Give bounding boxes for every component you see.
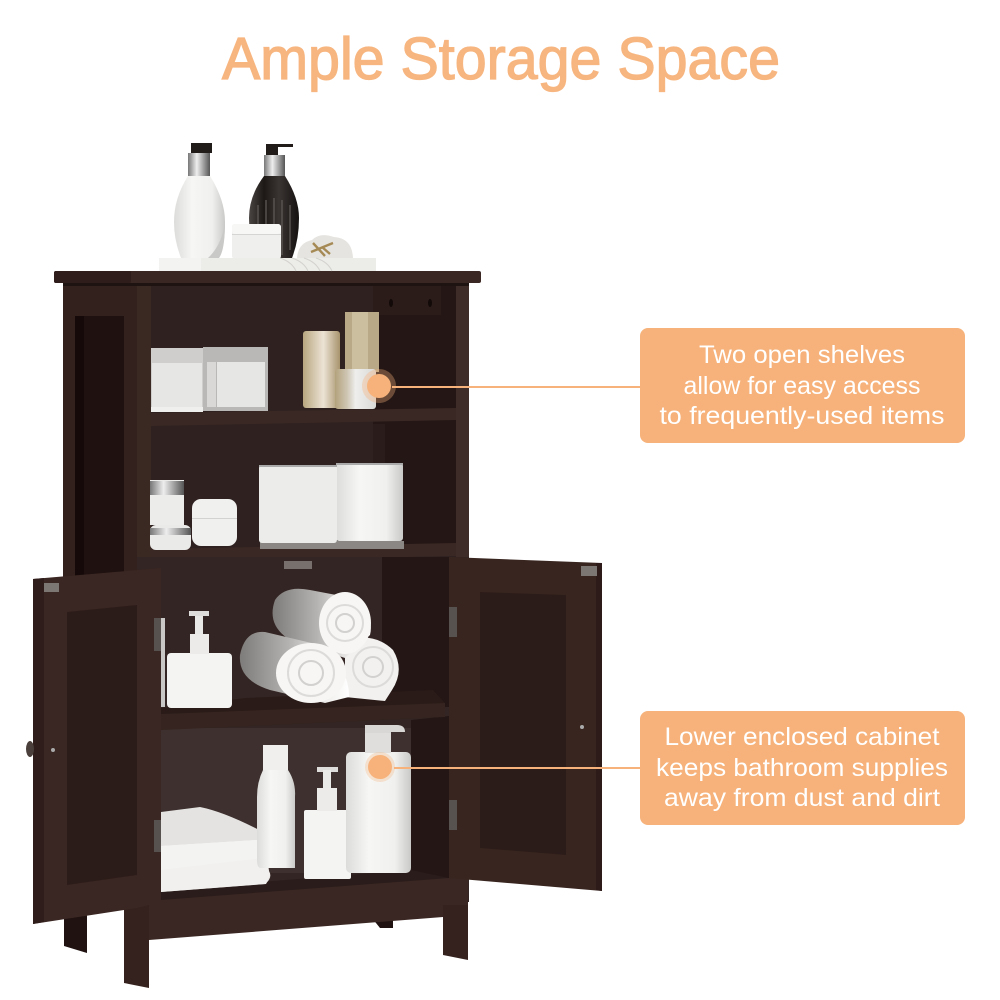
callout: open shelves — [640, 328, 965, 443]
items on cabinet floor — [161, 725, 411, 892]
front legs — [124, 905, 468, 988]
callout: lower cabinet: keeps bathroom supplies — [656, 754, 948, 782]
dried flower — [297, 235, 353, 258]
items on cabinet top — [159, 143, 376, 271]
cabinet floor and bottom rail — [149, 870, 468, 940]
tall lotion bottle — [257, 745, 295, 868]
large pump bottle — [346, 725, 411, 873]
cream jar — [192, 499, 237, 546]
callout: open shelves: Two open shelves — [699, 341, 905, 369]
callout marker: open shelves — [362, 369, 640, 403]
upper open shelving interior — [137, 282, 469, 572]
left door — [26, 568, 161, 924]
callout: lower cabinet — [640, 711, 965, 825]
cotton boxes — [151, 347, 268, 412]
candles — [303, 312, 379, 409]
right door — [449, 557, 602, 891]
hinge latch — [284, 561, 312, 569]
towel roll right — [345, 638, 399, 701]
silver cosmetic jars — [150, 480, 191, 550]
lower cabinet interior — [137, 557, 469, 902]
folded towels — [161, 807, 270, 892]
lower shelf — [161, 690, 445, 730]
upper shelf — [151, 408, 456, 426]
white tray — [159, 258, 376, 271]
small pump bottle — [304, 767, 351, 879]
callout: open shelves: allow for easy access — [684, 372, 920, 400]
towel roll top — [273, 589, 371, 658]
back legs — [64, 908, 393, 953]
title: Ample Storage Space — [222, 26, 780, 92]
upper left side panel — [63, 282, 139, 578]
callout: open shelves: to frequently-used items — [660, 402, 944, 430]
towel roll bottom — [240, 632, 349, 703]
callout: lower cabinet: Lower enclosed cabinet — [664, 723, 940, 751]
shelf reflection — [260, 541, 404, 549]
middle shelf — [151, 543, 456, 562]
white soap bottle — [174, 143, 225, 258]
toilet paper rolls — [259, 463, 403, 543]
cabinet — [26, 271, 602, 988]
items on lower shelf — [167, 589, 399, 708]
callout marker: lower cabinet — [365, 752, 640, 782]
white jar — [232, 224, 281, 259]
square pump bottle — [167, 611, 232, 708]
door hinges — [154, 607, 457, 852]
countertop — [54, 271, 481, 286]
callout: lower cabinet: away from dust and dirt — [664, 784, 940, 812]
black soap bottle — [249, 144, 299, 258]
items on middle shelf — [150, 463, 404, 550]
items on upper shelf — [151, 312, 379, 412]
rolled towels — [240, 589, 399, 703]
